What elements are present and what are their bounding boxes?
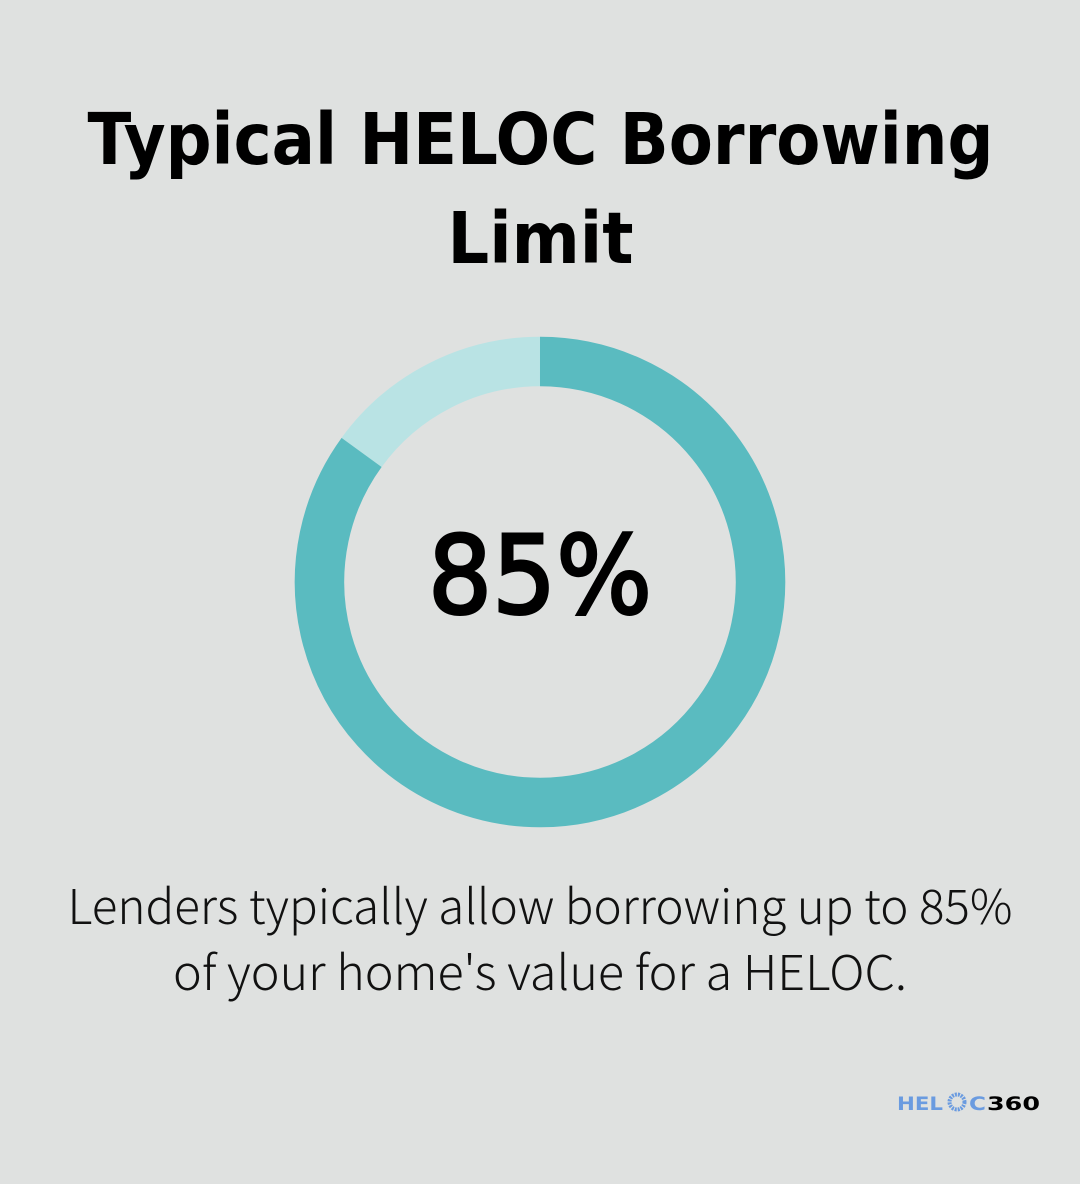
logo text: 360: 360: [987, 1093, 1040, 1115]
donut chart: 85%: [319, 362, 760, 802]
description text: Lenders typically allow borrowing up to 85%: [68, 868, 1012, 938]
title: [88, 98, 994, 280]
logo: HELOC360: [897, 1093, 1040, 1115]
donut track: remaining 15%: [362, 362, 540, 452]
center value: 85%: [428, 514, 652, 639]
donut value: 85%: [319, 362, 760, 802]
title: Limit: [448, 197, 634, 280]
logo text: HELOC: HEL: [897, 1093, 943, 1115]
logo text: C: C: [969, 1093, 986, 1115]
description text: of your home's value for a HELOC.: [173, 934, 907, 1004]
logo icon: swirl: [950, 1094, 964, 1110]
description text: [68, 868, 1012, 1004]
title: Typical HELOC Borrowing: [88, 98, 994, 181]
